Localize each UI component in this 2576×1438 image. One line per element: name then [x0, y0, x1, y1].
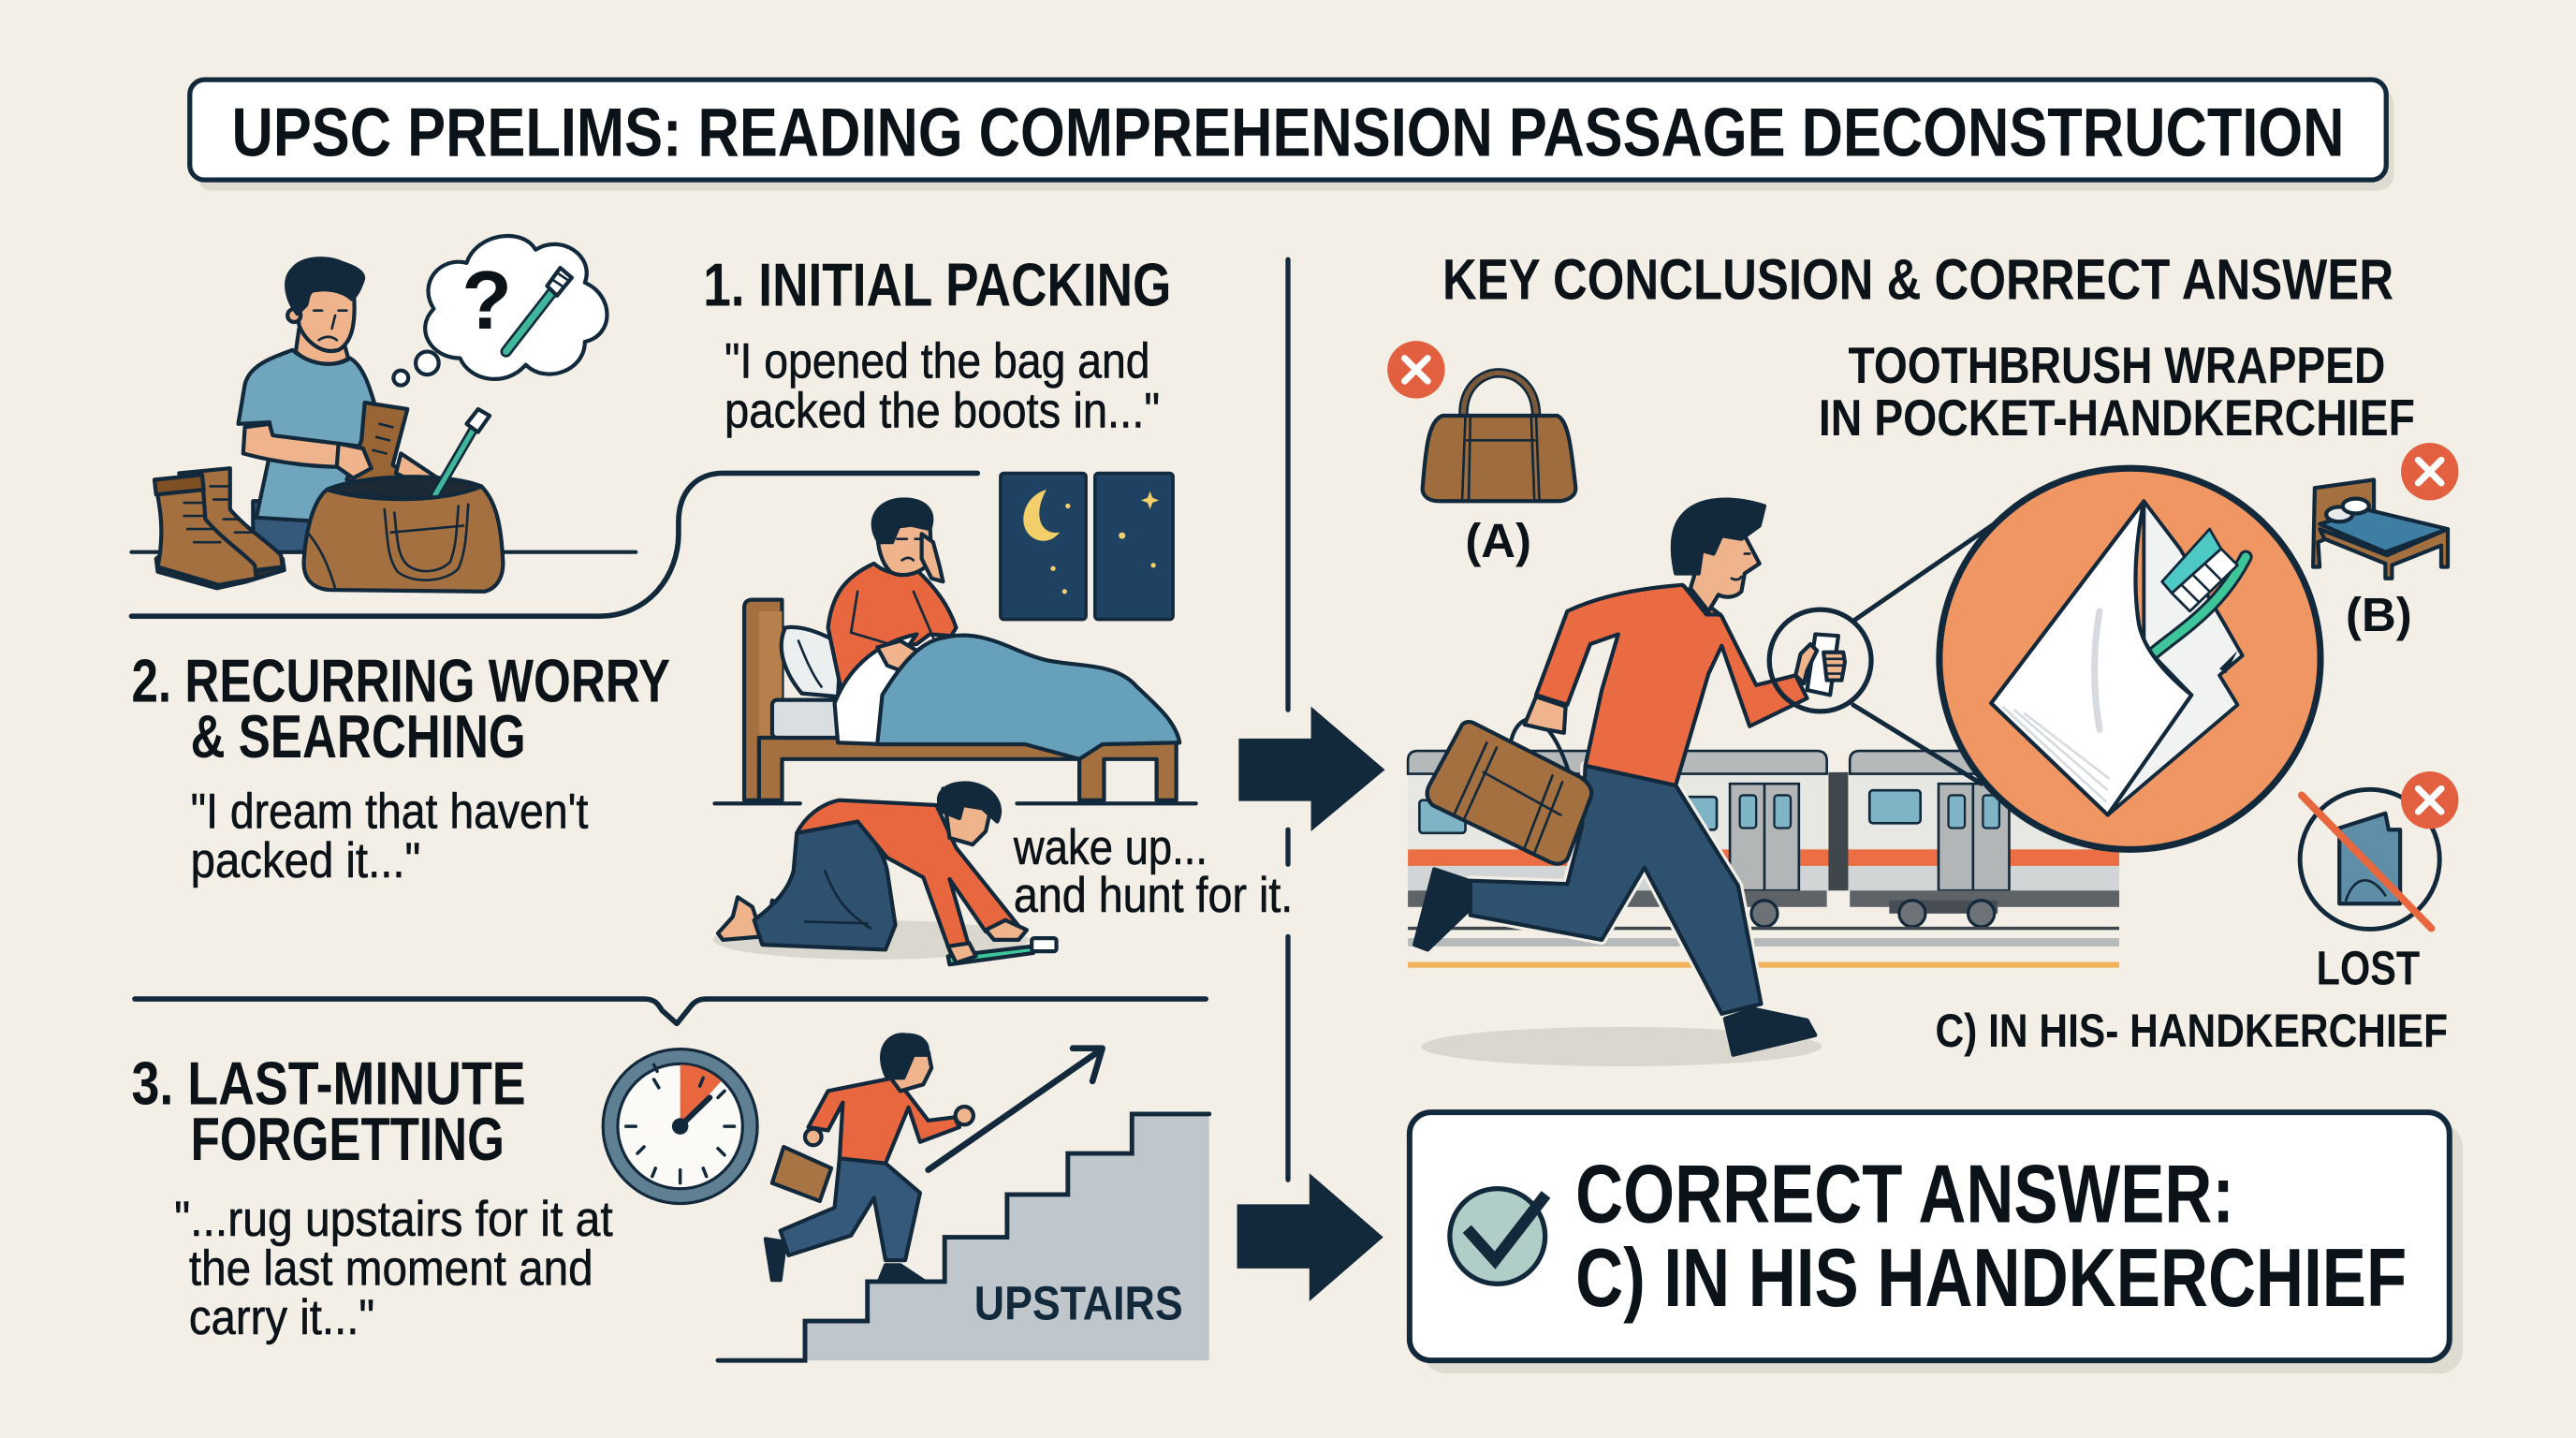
- quote: step 1: packed the boots in...": [724, 383, 1160, 438]
- heading: step 3: [131, 1049, 526, 1173]
- train: [1408, 751, 2119, 968]
- text: correct answer: C) IN HIS HANDKERCHIEF: [1575, 1232, 2407, 1324]
- option B: bed: (B): [2346, 588, 2412, 641]
- caption: wake up and hunt: wake up...: [1013, 820, 1208, 875]
- text: correct answer: CORRECT ANSWER:: [1575, 1149, 2234, 1240]
- quote: step 3: the last moment and: [189, 1240, 593, 1296]
- vertical divider: [1286, 259, 1290, 1180]
- heading: step 1: 1. INITIAL PACKING: [703, 250, 1171, 318]
- heading: toothbrush wrapped: [1819, 337, 2415, 447]
- icon: night window: [1001, 473, 1173, 620]
- magnifier lines: [1853, 520, 2001, 784]
- option A: bag: (A): [1465, 514, 1531, 567]
- arrow: to key conclusion: [1238, 707, 1385, 831]
- icon: man running upstairs with briefcase: [766, 1034, 973, 1282]
- label: upstairs: UPSTAIRS: [974, 1276, 1183, 1329]
- caption: wake up and hunt: [1013, 820, 1293, 923]
- option C: lost item: [2300, 771, 2458, 994]
- quote: step 2: [191, 785, 589, 888]
- quote: step 3: "...rug upstairs for it at: [174, 1192, 613, 1247]
- icon: clock: [603, 1049, 757, 1204]
- heading: step 3: 3. LAST-MINUTE: [131, 1049, 526, 1117]
- icon: worried man in bed: [714, 500, 1196, 803]
- heading: step 2: 2. RECURRING WORRY: [131, 646, 670, 714]
- text: correct answer: [1575, 1149, 2407, 1324]
- heading: step 3: FORGETTING: [191, 1105, 505, 1173]
- connector line from step 1 to step 2: [131, 473, 977, 616]
- chart: stairs going up: [718, 1114, 1209, 1360]
- heading: toothbrush wrapped: IN POCKET-HANDKERCHIEF: [1819, 389, 2415, 447]
- quote: step 2: "I dream that haven't: [191, 785, 589, 840]
- icon: man running with bag and handkerchief: [1414, 500, 1871, 1066]
- icon: man packing boots into bag: [131, 236, 636, 592]
- heading: step 2: & SEARCHING: [191, 702, 526, 770]
- divider with notch: [135, 999, 1206, 1023]
- arrow: upward direction: [929, 1049, 1103, 1170]
- heading: key conclusion: KEY CONCLUSION & CORRECT ANSWER: [1442, 247, 2393, 312]
- icon: man crawling and finding toothbrush: [713, 784, 1057, 964]
- option A: bag: [1387, 341, 1575, 567]
- quote: step 2: packed it...": [191, 833, 420, 888]
- quote: step 3: carry it...": [189, 1290, 374, 1345]
- heading: step 2: [131, 646, 670, 770]
- heading: toothbrush wrapped: TOOTHBRUSH WRAPPED: [1848, 337, 2385, 394]
- quote: step 1: "I opened the bag and: [724, 334, 1150, 389]
- quote: step 3: [174, 1192, 613, 1345]
- caption: wake up and hunt: and hunt for it.: [1014, 868, 1293, 923]
- arrow: to correct answer: [1237, 1173, 1383, 1301]
- quote: step 1: [724, 334, 1160, 438]
- label: option C: C) IN HIS- HANDKERCHIEF: [1935, 1005, 2448, 1057]
- title banner: [190, 80, 2393, 191]
- panel: correct answer: [1410, 1112, 2463, 1373]
- icon: thought bubble with toothbrush: ?: [461, 255, 512, 346]
- icon: small magnifier circle: [1769, 609, 1871, 712]
- icon: thought bubble with toothbrush: [393, 236, 607, 386]
- label: lost: LOST: [2317, 941, 2420, 994]
- icon: check mark: [1450, 1189, 1546, 1284]
- magnified handkerchief with toothbrush: [1939, 468, 2320, 849]
- option B: bed: [2313, 443, 2458, 641]
